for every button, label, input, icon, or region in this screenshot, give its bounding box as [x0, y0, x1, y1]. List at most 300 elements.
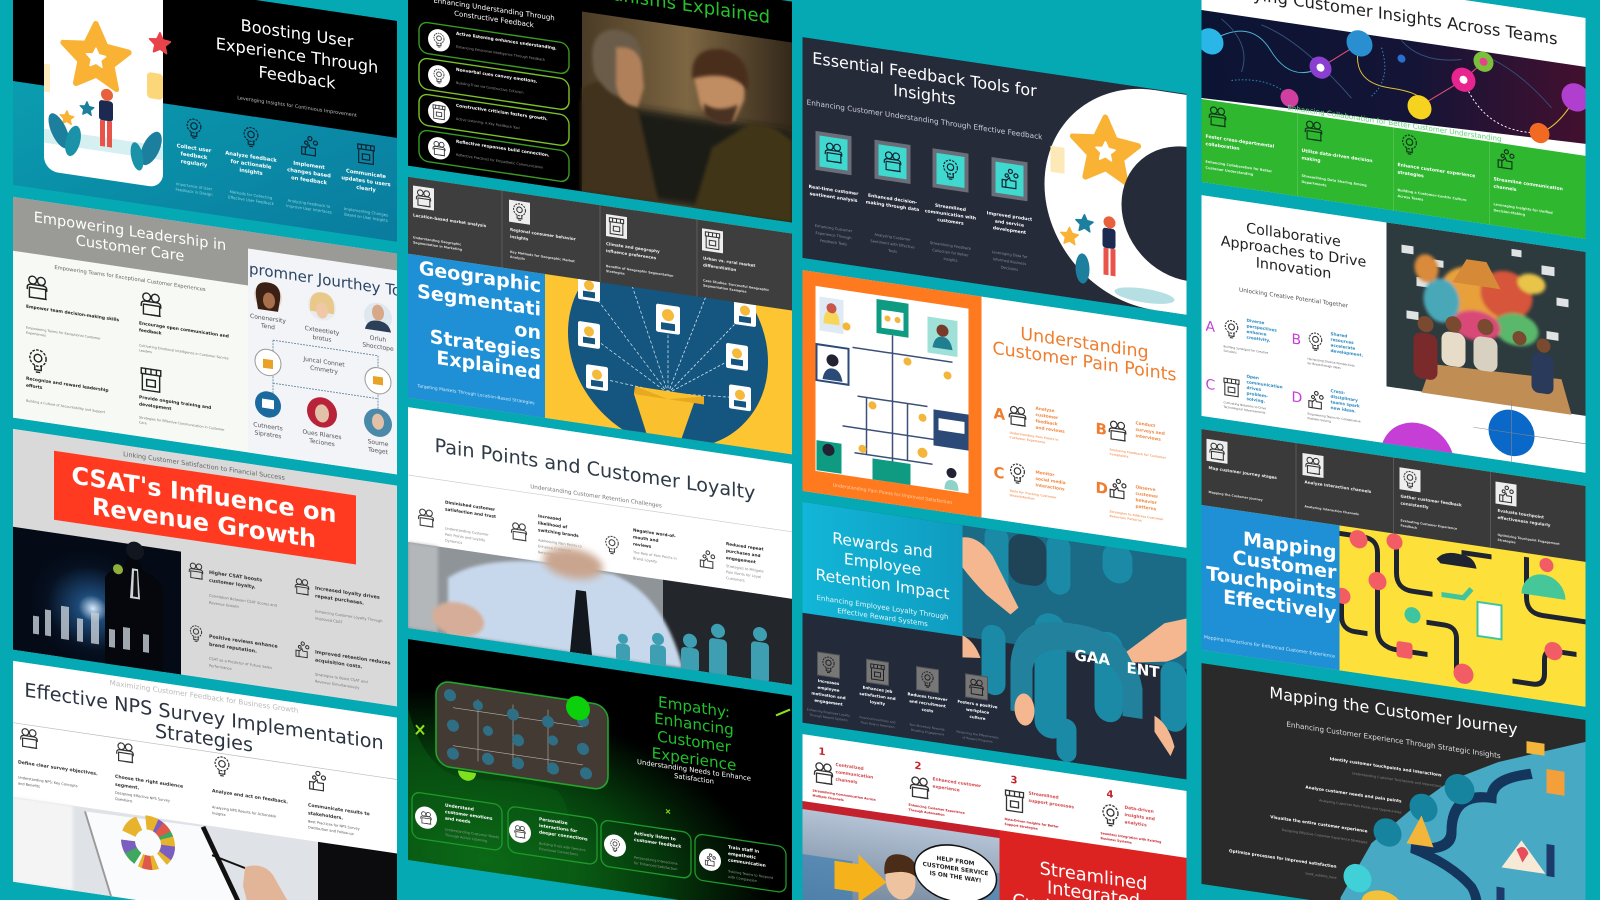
- pain point items: feedback: [1036, 418, 1058, 428]
- empathy cards: with Compassion: [728, 875, 757, 883]
- support items: [812, 746, 1161, 849]
- journey diagram image: Shocctope: [362, 341, 394, 353]
- touchpoint map illustration: [1334, 525, 1586, 702]
- title: Pain Points and Customer Loyalty: [435, 434, 755, 504]
- journey diagram image: Cxteeetiety: [305, 325, 339, 337]
- tool items: development: [993, 225, 1027, 236]
- retention items: Reduces turnover: [908, 691, 947, 702]
- survey steps: [18, 727, 370, 838]
- pain point items: customer: [1036, 412, 1059, 421]
- CSAT items: acquisition costs.: [315, 657, 362, 670]
- journey band items: Analyzing Interaction Channels: [1304, 504, 1359, 516]
- feedback steps: updates to users: [341, 175, 391, 188]
- listening cards: [419, 21, 569, 183]
- tool items: Real-time customer: [809, 185, 858, 197]
- team items: making: [1302, 155, 1321, 164]
- tool items: communication with: [925, 208, 976, 222]
- journey diagram image: [248, 248, 411, 477]
- journey band items: Evaluating Customer Experience: [1400, 518, 1457, 531]
- retention items: Boosting Engagement: [911, 728, 945, 737]
- retention items: and recruitment: [909, 698, 946, 709]
- band items: Analysis: [510, 255, 525, 261]
- collaboration items: teams spark: [1330, 399, 1360, 409]
- title: Rewards and: [832, 528, 933, 562]
- journey diagram image: brotus: [312, 334, 332, 344]
- retention items: Enhances job: [863, 685, 892, 694]
- team items: Departments: [1302, 180, 1326, 187]
- band items: insights: [510, 234, 529, 242]
- feedback steps: Effective User Feedback: [228, 194, 275, 206]
- journey diagram image: Cutneerts: [253, 421, 283, 433]
- band items: Understanding Geographic: [413, 235, 461, 247]
- journey steps: Understanding Customer Touchpoints and Interactions: [1352, 771, 1442, 789]
- collaboration items: Problem-Solving: [1308, 416, 1331, 424]
- CSAT items: Improved retention reduces: [315, 650, 391, 667]
- support items: 3: [1010, 775, 1017, 787]
- support items: Data-Driven Insights for Better: [1004, 817, 1059, 829]
- tool items: Feedback Tools: [820, 239, 847, 247]
- empathy cards: empathetic: [728, 851, 756, 861]
- subtitle: Unlocking Creative Potential Together: [1239, 288, 1349, 310]
- loyalty items: purchases and: [726, 548, 760, 558]
- support items: Support Strategies: [1004, 822, 1038, 831]
- collaboration items: enhance: [1247, 329, 1267, 337]
- loyalty items: mouth and: [633, 534, 659, 543]
- CSAT items: Improved CSAT: [315, 616, 343, 625]
- feedback steps: feedback: [181, 151, 208, 161]
- retention items: Their Role in Retention: [860, 720, 895, 729]
- band items: Segmentation in Marketing: [413, 240, 463, 252]
- journey diagram image: Orluh: [370, 335, 386, 344]
- pain point items: Behaviors Patterns: [1110, 514, 1142, 523]
- loyalty items: [418, 500, 764, 582]
- title: Innovation: [1256, 255, 1331, 282]
- title banner: Revenue Growth: [92, 492, 316, 554]
- journey band items: Strategies: [1498, 538, 1516, 545]
- loyalty items: Negative word-of-: [633, 527, 676, 539]
- team items: Foster cross-departmental: [1206, 135, 1274, 150]
- title: Boosting User: [241, 16, 353, 51]
- title: Insights: [893, 81, 956, 109]
- team items: [1206, 105, 1563, 222]
- leadership items: feedback: [139, 327, 163, 337]
- pain point items: B: [1096, 419, 1107, 439]
- collaboration items: creativity.: [1247, 334, 1271, 343]
- empathy cards: Personalize: [539, 817, 568, 827]
- journey diagram image: Teciones: [308, 437, 335, 448]
- subtitle: Constructive Feedback: [454, 9, 535, 29]
- retention items: Measuring the Effectiveness: [956, 729, 999, 740]
- title: Essential Feedback Tools for: [812, 49, 1037, 101]
- tool items: Improved product: [987, 211, 1032, 223]
- card icons and text: Reflective responses build connection.: [456, 139, 550, 159]
- journey steps: book_subtitle_here: [1306, 871, 1336, 880]
- title: Explained: [436, 346, 541, 384]
- journey band items: Gather customer feedback: [1400, 493, 1462, 508]
- title: Effective NPS Survey Implementation: [24, 678, 384, 755]
- red title block: Streamlined: [1040, 858, 1147, 895]
- subtitle: Mapping Interactions for Enhanced Customer Experience: [1204, 634, 1335, 660]
- survey steps: Communicate results to: [308, 803, 370, 817]
- survey steps: Distribution and Follow-up: [308, 825, 354, 836]
- pain point items: Conduct: [1136, 421, 1155, 429]
- survey steps: Define clear survey objectives.: [18, 759, 98, 777]
- survey steps: Understanding NPS: Key Concepts: [18, 775, 78, 788]
- band items: Segmentation Examples: [703, 283, 747, 294]
- survey steps: Insights: [212, 811, 226, 817]
- title banner: [54, 451, 356, 564]
- journey diagram image: Toeget: [367, 446, 389, 456]
- support items: experience: [932, 784, 960, 794]
- title: Segmentati: [417, 280, 541, 321]
- retention items: Through Reward Systems: [808, 713, 848, 722]
- subtitle: Enhancing Customer Experience Through Strategic Insights: [1286, 720, 1501, 760]
- card icons and text: Nonverbal cues convey emotions.: [456, 67, 538, 85]
- tool items: Tools: [887, 249, 897, 254]
- panel: mapping touchpoints slide: [1202, 429, 1586, 707]
- journey diagram image: promner Jourthey Tou: [249, 260, 411, 302]
- subtitle: Linking Customer Satisfaction to Financial Success: [123, 450, 286, 482]
- support items: 4: [1107, 789, 1113, 801]
- pain point items: customer: [1136, 491, 1159, 500]
- loyalty items: switching brands: [538, 527, 579, 538]
- x marks: [416, 654, 790, 832]
- band items: Urban vs. rural market: [703, 255, 755, 268]
- tool items: Insights: [943, 257, 958, 263]
- tool items: customers: [937, 217, 964, 227]
- CSAT items: brand reputation.: [209, 642, 257, 655]
- retention items: employee: [818, 685, 840, 693]
- tool items: making through data: [866, 199, 919, 213]
- band items: Climate and geography: [606, 241, 660, 254]
- pain point items: patterns: [1136, 504, 1157, 513]
- title: Employee: [844, 549, 921, 579]
- collaboration items: Technological Advancements: [1223, 405, 1266, 415]
- card icons and text: Active listening enhances understanding.: [456, 31, 557, 52]
- subtitle: Empowering Teams for Exceptional Customer Experiences: [54, 265, 206, 293]
- card icons and text: Reflective Practices for Empathetic Communication: [456, 153, 543, 170]
- feedback steps: Feedback in Design: [175, 187, 213, 197]
- network image: [1198, 6, 1590, 155]
- CSAT items: [189, 563, 391, 695]
- empathy cards: Actively listen to: [634, 831, 676, 843]
- card icons and text: Building Trust via Constructive Criticism: [456, 81, 524, 95]
- team items: strategies: [1398, 170, 1424, 179]
- support items: support processes: [1028, 798, 1074, 811]
- feedback steps: insights: [239, 168, 263, 177]
- support items: communication: [836, 769, 873, 781]
- survey steps: Best Practices for NPS Survey: [308, 819, 360, 831]
- panel: streamlined integrated support slide: [802, 734, 1186, 900]
- band items: Regional consumer behavior: [510, 227, 576, 242]
- panel: understanding pain points slide: [802, 270, 1186, 548]
- tool items: Experience Through: [815, 231, 852, 240]
- tool items: Sentiment with Effective: [870, 239, 915, 250]
- empathy cards: Understand: [445, 803, 474, 813]
- title: Mapping: [1243, 527, 1336, 564]
- feedback steps: Methods for Collecting: [230, 189, 272, 200]
- feedback steps: on feedback: [291, 175, 327, 187]
- support items: Data-driven: [1124, 806, 1154, 815]
- support items: channels: [836, 777, 858, 786]
- journey band items: Evaluate touchpoint: [1498, 508, 1544, 520]
- CSAT items: repeat purchases.: [315, 593, 364, 607]
- collaboration items: C: [1206, 377, 1215, 394]
- support items: analytics: [1125, 819, 1147, 829]
- feedback steps: Based on User Insights: [344, 212, 388, 223]
- loyalty items: Enhance Customer: [538, 544, 572, 553]
- title: Experience Through: [216, 34, 378, 77]
- collaboration items: Empowering Teams for Collaborative: [1308, 412, 1361, 424]
- title: Enhancing: [654, 710, 734, 739]
- loyalty items: satisfaction and trust: [445, 506, 496, 519]
- retention items: loyalty: [870, 699, 886, 706]
- card icons and text: Enhancing Emotional Intelligence Through Feedback: [456, 45, 545, 62]
- collaboration items: drives: [1247, 385, 1262, 392]
- band items: Case Studies: Successful Geographic: [703, 278, 769, 292]
- survey steps: segment.: [115, 782, 139, 791]
- collaboration items: problem-: [1247, 390, 1268, 399]
- empathy cards: Train staff in: [728, 845, 759, 855]
- journey diagram image: Cmmetry: [310, 365, 338, 376]
- network photo card: [436, 680, 608, 791]
- team items: Customer Understanding: [1205, 166, 1254, 177]
- title: Strategies: [430, 325, 541, 364]
- tool items: Informed Business: [993, 257, 1026, 266]
- retention items: satisfaction and: [859, 691, 896, 701]
- leadership items: Care: [139, 420, 147, 425]
- collaboration items: solving.: [1247, 396, 1265, 404]
- collaboration items: [1206, 312, 1363, 429]
- survey steps: Choose the right audience: [115, 775, 183, 790]
- leadership items: Empowering Teams for Exceptional Customer: [26, 326, 101, 341]
- two men photo: [582, 11, 792, 223]
- feedback steps: changes based: [287, 167, 331, 180]
- empathy cards: Personalizing Interactions: [634, 855, 678, 866]
- title: Feedback: [258, 62, 336, 93]
- title: on: [514, 318, 541, 344]
- collaboration items: disciplinary: [1330, 394, 1358, 403]
- panel: CSAT revenue slide: [13, 429, 397, 714]
- tool items: Streamlining Feedback: [930, 241, 971, 251]
- star illustration in circle: [1044, 74, 1264, 326]
- survey steps: and Benefits: [18, 781, 40, 789]
- loyalty items: engagement: [726, 555, 756, 564]
- support items: Seamless Integration with Existing: [1100, 831, 1161, 844]
- team items: Enhancing Collaboration for Better: [1206, 160, 1272, 173]
- title: Customer: [1232, 546, 1337, 584]
- subtitle: Enhancing Employee Loyalty Through: [817, 593, 948, 621]
- subtitle: Enhancing Collaboration for Better Customer Understanding: [1287, 103, 1502, 143]
- title: Mapping the Customer Journey: [1269, 683, 1518, 739]
- collaboration items: Open: [1246, 374, 1259, 380]
- journey steps: Designing Effective Customer Experience Strategies: [1282, 828, 1368, 845]
- feedback steps: Collect user: [177, 143, 211, 154]
- panel: boosting user experience slide: [13, 0, 397, 242]
- leadership items: Provide ongoing training and: [139, 395, 211, 411]
- collaboration items: development.: [1330, 348, 1363, 358]
- support items: insights and: [1125, 812, 1155, 822]
- support items: Centralized: [836, 763, 864, 772]
- panel: empowering leadership slide: [13, 197, 411, 477]
- leadership items: Building a Culture of Accountability and Support: [26, 399, 106, 414]
- panel: essential feedback tools slide: [802, 37, 1264, 326]
- pain point items: Analyzing Feedback for Customer: [1110, 447, 1166, 460]
- tool items: Enhancing Customer: [815, 224, 852, 233]
- pain point items: Strategies to Address Customer: [1110, 509, 1163, 521]
- collaboration items: Shared: [1330, 331, 1347, 339]
- funnel and audience illustration: [568, 278, 768, 443]
- retention items: workplace: [966, 707, 989, 715]
- empathy cards: [412, 792, 786, 893]
- service room cartoon image: [802, 801, 1000, 900]
- journey diagram image: Oues Rlarses: [302, 429, 342, 441]
- pain point items: Customer Experience: [1010, 435, 1045, 444]
- red title block: [1000, 830, 1186, 900]
- collaboration items: Cultivating Networks to Drive: [1224, 400, 1266, 411]
- team items: Enhance customer experience: [1398, 163, 1475, 180]
- title: Understanding: [1020, 324, 1149, 363]
- journey steps: Analyzing Customer Pain Points and Opportunities: [1319, 798, 1402, 815]
- speech bubble: [914, 840, 996, 900]
- title: Strategies: [155, 719, 253, 757]
- empathy cards: for Enhanced Satisfaction: [634, 861, 677, 871]
- subtitle: Maximizing Customer Feedback for Business Growth: [110, 678, 298, 715]
- pain point items: Understanding Pain Points in: [1010, 431, 1059, 442]
- journey band items: Feedback: [1400, 523, 1418, 530]
- title: Empathy:: [658, 693, 730, 722]
- pain point items: and reviews: [1036, 425, 1065, 435]
- journey band items: [1206, 439, 1560, 551]
- retention items: motivation and: [811, 690, 846, 700]
- support items: 2: [914, 761, 921, 773]
- journey diagram image: Tend: [260, 322, 275, 331]
- loyalty items: Increased: [538, 513, 561, 522]
- green band: [1202, 99, 1586, 239]
- loyalty items: Pain Points and Loyalty: [445, 532, 485, 542]
- pain point items: Monitor: [1036, 471, 1054, 478]
- panel: pain points loyalty slide: [408, 407, 792, 688]
- feedback steps: for actionable: [231, 159, 272, 171]
- empathy cards: and needs: [445, 815, 471, 825]
- loyalty items: Customers: [726, 576, 745, 583]
- team items: channels: [1494, 184, 1517, 193]
- tool items: Leveraging Data for: [992, 250, 1027, 259]
- support items: Streamlining Communication Across: [812, 788, 876, 802]
- journey steps: Identify customer touchpoints and interactions: [1330, 756, 1442, 778]
- retention items: Enhancing Employee Loyalty: [807, 707, 850, 718]
- empathy cards: communication: [728, 857, 766, 869]
- collaboration items: Cross-: [1330, 388, 1345, 395]
- tool items: Streamlined: [935, 204, 966, 213]
- journey band items: effectiveness regularly: [1498, 515, 1551, 528]
- subtitle: Enhancing Customer Understanding Through Effective Feedback: [807, 98, 1043, 142]
- band items: Benefits of Geographic Segmentation: [606, 264, 673, 278]
- title: Customer: [657, 727, 732, 756]
- engagement illustration: GAA: [1074, 646, 1110, 669]
- tool items: Enhanced decision-: [868, 194, 917, 206]
- survey steps: stakeholders.: [308, 810, 343, 822]
- feedback steps: Communicate: [346, 168, 386, 180]
- journey steps: Visualize the entire customer experience: [1270, 814, 1368, 834]
- leadership items: Experiences: [26, 331, 46, 338]
- title: Customer Pain Points: [993, 339, 1176, 386]
- title banner: CSAT's Influence on: [71, 461, 337, 529]
- leadership items: development: [139, 401, 171, 412]
- pain point items: interactions: [1036, 482, 1065, 493]
- collaboration items: communication: [1247, 379, 1283, 390]
- collaboration items: resources: [1330, 337, 1354, 345]
- journey band items: Mapping the Customer Journey: [1208, 490, 1263, 502]
- illustration card: star and person: [44, 0, 170, 189]
- team items: Building a Customer-Centric Culture: [1398, 188, 1467, 202]
- band items: differentiation: [703, 262, 736, 272]
- tool items: [809, 132, 1033, 274]
- retention items: Fosters a positive: [957, 699, 998, 710]
- innovation meeting photo: [1386, 222, 1586, 417]
- green blobs: [458, 696, 590, 781]
- leadership items: Empower team decision-making skills: [26, 304, 120, 323]
- speech bubble: HELP FROM: [937, 856, 974, 867]
- card icons and text: [428, 27, 557, 177]
- pain point items: Tools for Tracking Customer: [1010, 489, 1056, 500]
- team items: Decision-Making: [1494, 208, 1526, 217]
- CSAT items: Performance: [209, 664, 233, 671]
- leadership items: Leaders: [139, 348, 152, 354]
- support items: Streamlined: [1028, 791, 1059, 801]
- CSAT items: Revenue Growth: [209, 601, 239, 609]
- collaboration items: Solutions: [1224, 349, 1237, 355]
- leadership items: Encourage open communication and: [139, 321, 229, 340]
- support items: Through Automation: [908, 808, 945, 817]
- retention items: engagement: [814, 698, 843, 707]
- band items: influence preferences: [606, 248, 657, 261]
- pain point items: C: [994, 463, 1005, 483]
- journey band items: Map customer journey stages: [1208, 465, 1277, 480]
- title: Customer Care: [76, 232, 184, 265]
- journey band items: Analyze interaction channels: [1304, 479, 1372, 494]
- flow diagram illustration: [816, 286, 968, 494]
- survey steps: Designing Effective NPS Survey: [115, 791, 170, 803]
- subtitle: Effective Reward Systems: [837, 606, 928, 628]
- retention items: culture: [969, 714, 986, 721]
- CSAT items: CSAT as a Predictor of Future Sales: [209, 657, 272, 670]
- support items: Enhanced customer: [932, 777, 981, 789]
- retention items: [807, 650, 999, 745]
- loyalty items: Brand Loyalty: [633, 556, 657, 564]
- footer caption: Understanding Pain Points for Improved Satisfaction: [833, 483, 952, 506]
- loyalty items: reviews: [633, 541, 652, 549]
- collaboration items: B: [1292, 331, 1301, 349]
- retention items: of Reward Programs: [962, 735, 993, 744]
- empathy cards: deeper connections: [539, 829, 588, 843]
- panel: unifying customer insights slide: [1198, 0, 1590, 239]
- journey steps: [1229, 741, 1442, 896]
- band items: Strategies: [606, 269, 625, 276]
- pain point items: D: [1096, 478, 1108, 498]
- team items: Utilize data-driven decision: [1302, 149, 1373, 164]
- survey steps: Questions: [115, 797, 133, 803]
- laptop photo: [13, 797, 397, 900]
- journey diagram image: Conenersity: [250, 313, 286, 325]
- tool items: sentiment analysis: [810, 191, 858, 204]
- pain point items: Complaints: [1110, 452, 1129, 459]
- survey steps: Analyze and act on feedback.: [212, 788, 288, 805]
- panel: geographic segmentation slide: [408, 177, 792, 466]
- businessman with figures photo: [408, 540, 792, 685]
- subtitle: Understanding Customer Retention Challenges: [530, 484, 662, 510]
- leadership items: Recognize and reward leadership: [26, 377, 109, 394]
